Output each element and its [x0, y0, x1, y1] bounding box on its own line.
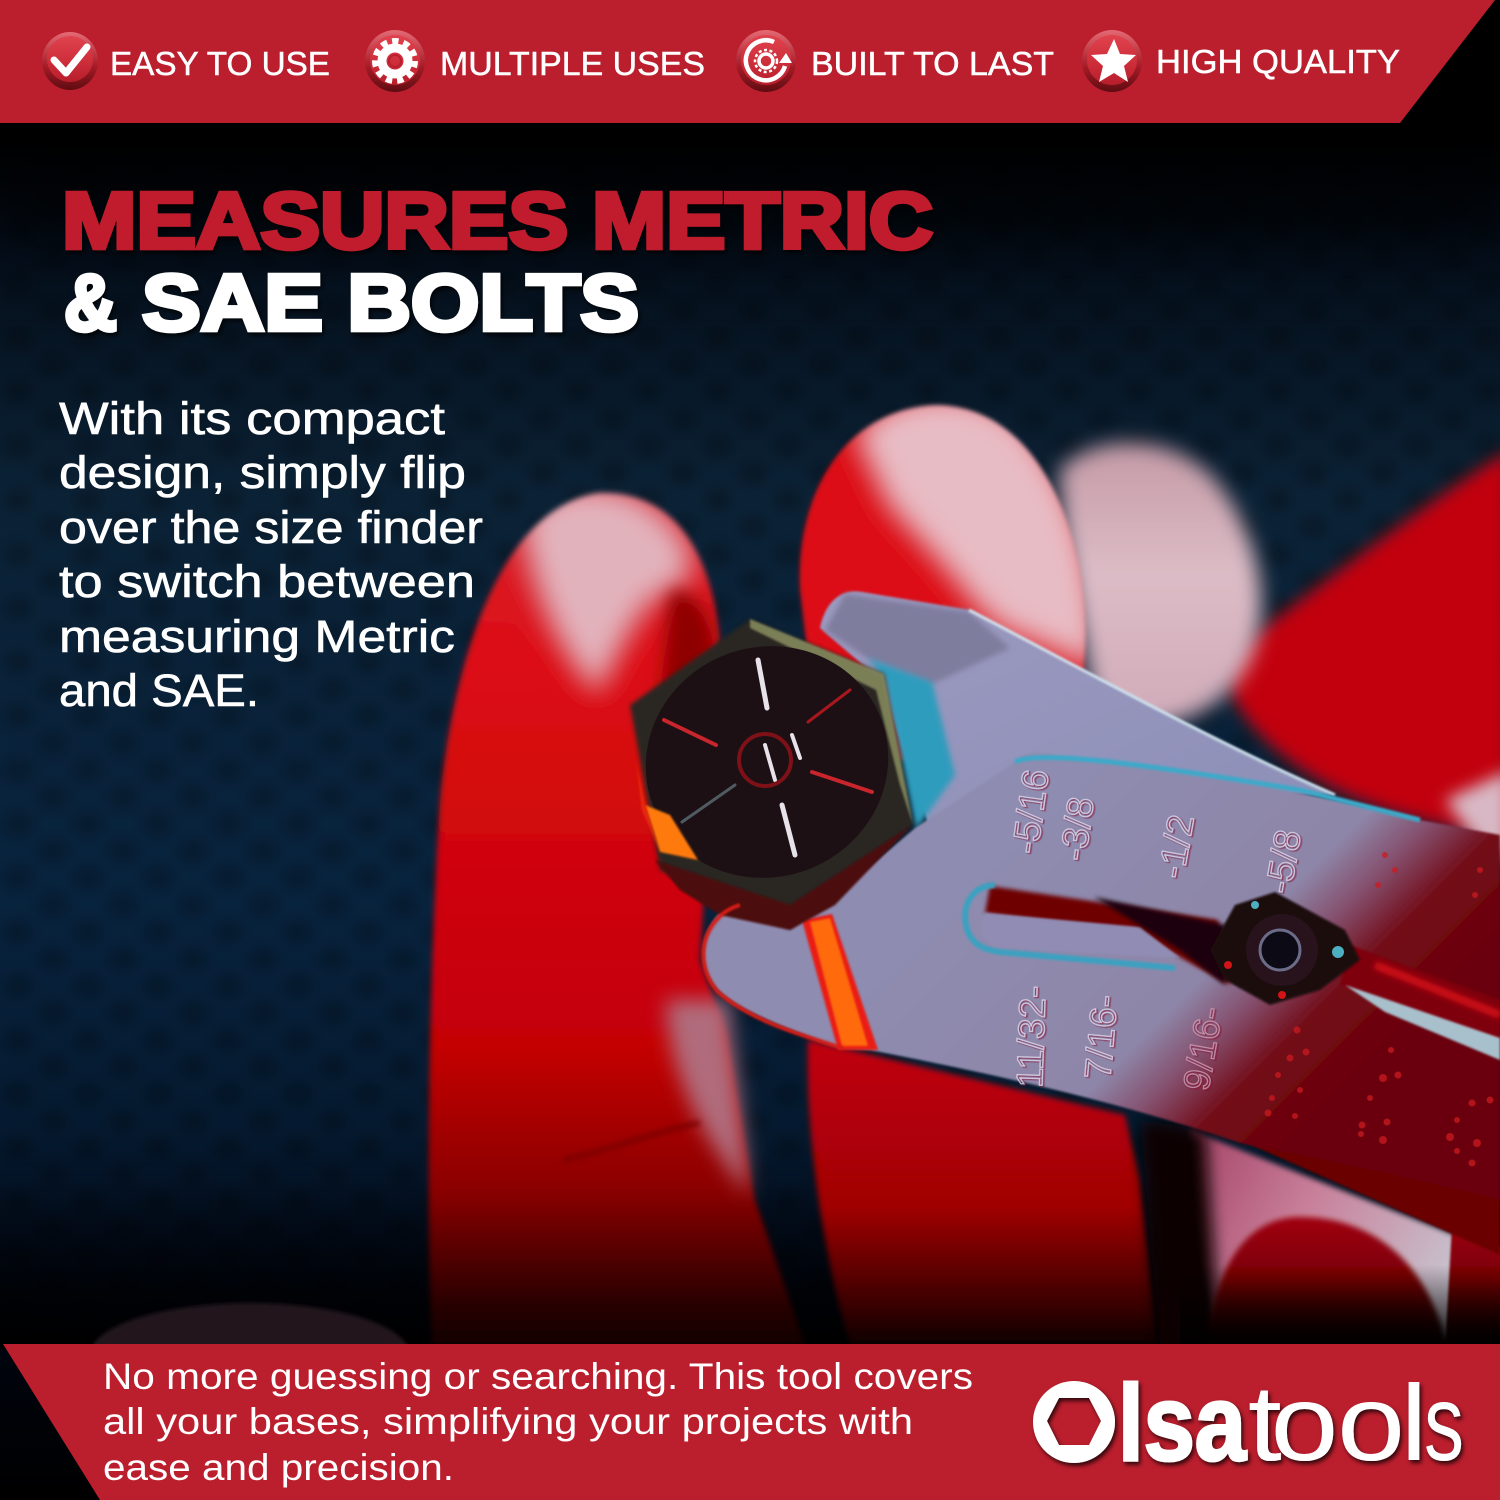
lavender back leaf seen through the slot — [981, 913, 1180, 958]
heading line 1: MEASURES — [62, 176, 568, 265]
teal edge of jaw — [868, 658, 955, 830]
stamped size markings: -3/8 — [1052, 794, 1102, 863]
heading line 1 — [62, 176, 933, 265]
bottom text block — [103, 1356, 973, 1488]
orange reflection strip — [802, 914, 878, 1050]
photo: wrench-style size finder tool — [613, 591, 1500, 1255]
icon: star badge — [1082, 30, 1142, 92]
heading — [62, 176, 933, 347]
crease — [563, 1123, 700, 1160]
pale sliver at right edge — [1445, 770, 1500, 860]
feature: multiple uses — [365, 30, 705, 92]
wordmark heavy: lsa — [1118, 1362, 1247, 1483]
bolt face — [613, 612, 921, 912]
lower curved jaw tip rim — [703, 905, 842, 1048]
orange glow on bolt edge — [645, 805, 698, 860]
body text block: With its compact — [59, 393, 446, 444]
label: EASY TO USE — [110, 45, 330, 82]
pale lower finger highlight — [666, 1000, 748, 1195]
heading line 2: SAE BOLTS — [142, 258, 639, 347]
photo: hand holding the bolt — [90, 393, 1500, 1407]
label: BUILT TO LAST — [811, 45, 1054, 82]
stamped size markings: 7/16- — [1077, 993, 1125, 1081]
second finger tip with pale pad — [800, 393, 1100, 760]
top banner — [0, 0, 1495, 123]
dark wedge in the slot — [1094, 897, 1225, 985]
slot dark red upper opening — [985, 886, 1230, 985]
label: MULTIPLE USES — [440, 45, 705, 82]
slot teal edge — [965, 885, 1175, 968]
pivot rivet — [1210, 892, 1360, 1005]
lower right: pale finger under tool — [1190, 1130, 1455, 1340]
far right red — [1445, 1230, 1500, 1350]
lit jaw edge — [969, 610, 1335, 795]
hex bolt head — [613, 612, 921, 930]
body text block: measuring Metric — [59, 611, 455, 662]
back leaf under blade on the right — [1240, 1140, 1500, 1255]
heading line 2: & — [64, 258, 117, 347]
second leaf right of the rivet — [1340, 945, 1500, 1045]
lower right red curve — [1205, 1217, 1448, 1350]
feature: easy to use — [42, 32, 330, 90]
stamped size markings: -5/16 — [1004, 767, 1057, 856]
banner background — [0, 0, 1495, 123]
wordmark light: tool — [1248, 1363, 1428, 1483]
banner background — [3, 1344, 1500, 1500]
feature: built to last — [736, 30, 1054, 92]
icon: gear badge — [365, 30, 425, 92]
teal top edge of blade — [1015, 758, 1420, 820]
hex O mark — [1033, 1381, 1115, 1463]
first finger with pale pad — [429, 486, 805, 1345]
bottom text block: No more guessing or searching. This tool covers — [103, 1356, 973, 1397]
upper jaw — [820, 591, 1335, 830]
body text block: design, simply flip — [59, 447, 466, 498]
body text block — [59, 393, 483, 716]
right blurred finger — [1227, 450, 1500, 840]
heading line 1: METRIC — [592, 176, 933, 265]
head markings — [664, 660, 872, 855]
white sliver below the second leaf — [1345, 985, 1500, 1060]
feature: high quality — [1082, 30, 1400, 92]
icon: cycle gear badge — [736, 30, 796, 92]
stamped size markings: -1/2 — [1151, 811, 1202, 881]
wordmark final letter: s — [1424, 1362, 1464, 1483]
stamped size markings — [1004, 767, 1309, 1093]
bolt side below the head — [655, 825, 912, 930]
blurred knuckle at bottom left — [90, 1303, 410, 1407]
dark gap beside pale finger — [1140, 1120, 1220, 1345]
third finger — [1060, 443, 1261, 730]
bright red edge on the second leaf — [1375, 965, 1500, 1015]
logo: Olsatools — [1033, 1362, 1464, 1483]
bottom text block: ease and precision. — [103, 1447, 454, 1488]
stamped size markings: -5/8 — [1258, 826, 1309, 896]
body text block: to switch between — [59, 556, 475, 607]
label: HIGH QUALITY — [1156, 43, 1400, 80]
bottom text block: all your bases, simplifying your projects with — [103, 1401, 913, 1442]
bottom banner — [3, 1344, 1500, 1500]
second finger lower part — [808, 1040, 1158, 1345]
main blade — [703, 753, 1500, 1200]
body text block: and SAE. — [59, 665, 259, 716]
stamped size markings: 11/32- — [1009, 985, 1054, 1088]
icon: check mark badge — [42, 32, 98, 90]
stamped size markings: 9/16- — [1176, 1003, 1231, 1093]
bottom darkening of the lower right — [1180, 1265, 1500, 1350]
shaded patch on jaw — [825, 594, 1010, 685]
faint red stamped marks on the right — [1264, 852, 1494, 1166]
body text block: over the size finder — [59, 502, 483, 553]
